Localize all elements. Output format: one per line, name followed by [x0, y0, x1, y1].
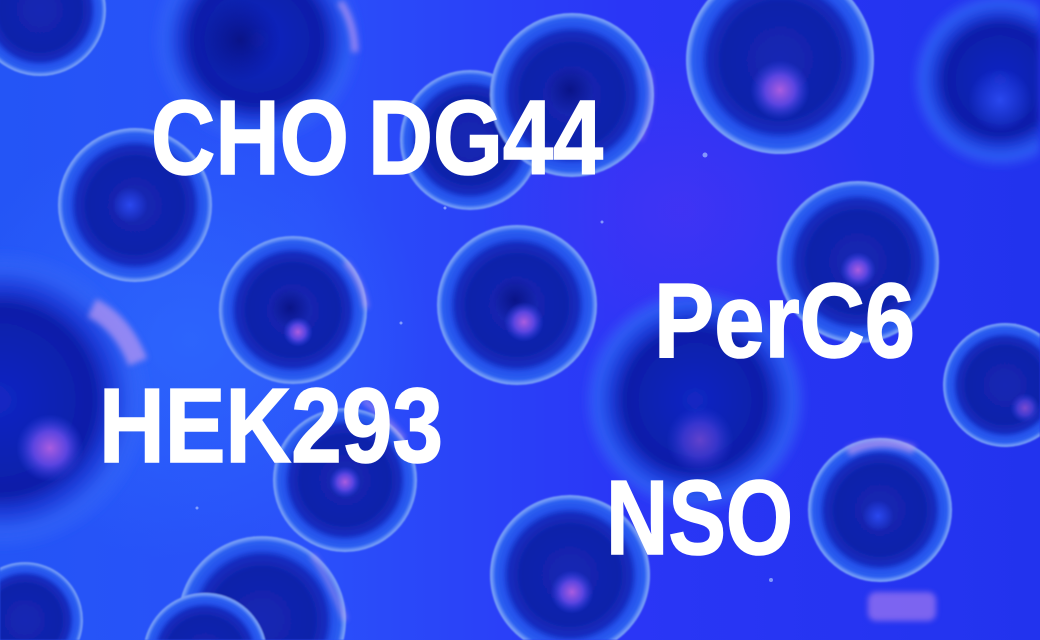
pink rim highlights [92, 2, 914, 620]
label: CHO DG44: CHO [151, 79, 349, 197]
label: HEK293: HEK293 [99, 367, 443, 485]
label: PerC6: PerC6 [654, 262, 915, 380]
label: CHO DG44 [151, 79, 603, 197]
label: CHO DG44: DG44 [368, 79, 603, 197]
label: NSO: NSO [606, 459, 793, 577]
pink glow at bottom [868, 592, 936, 621]
floating particles [196, 152, 773, 582]
